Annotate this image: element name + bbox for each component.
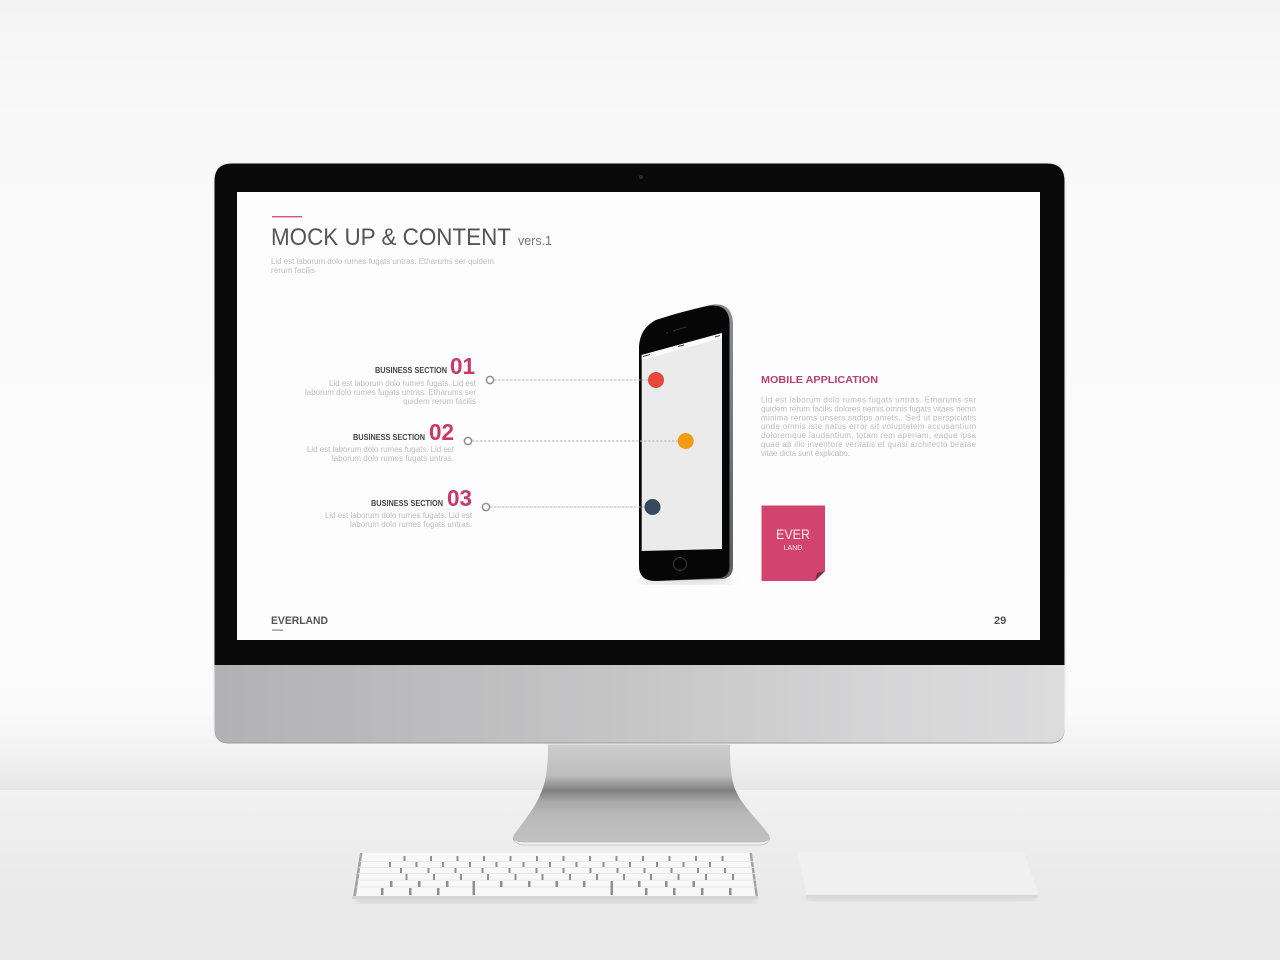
paragraph: mobile application bbox=[761, 396, 977, 458]
section 01: laborum dolo rumes fugats untras. Etharums ser bbox=[305, 388, 476, 397]
section 03: laborum dolo rumes fugats untras. bbox=[350, 520, 472, 529]
key row lines bbox=[356, 862, 757, 887]
subtitle text bbox=[271, 257, 494, 275]
key gaps bbox=[381, 856, 734, 895]
card: everland bbox=[762, 506, 825, 581]
monitor stand bbox=[513, 744, 770, 845]
section 03: Lid est laborum dolo rumes fugats. Lid est bbox=[325, 511, 473, 520]
slide screen bbox=[237, 192, 1040, 640]
section 02: 02 bbox=[429, 419, 454, 445]
section 01 bbox=[305, 353, 477, 406]
paragraph: mobile application: doloremque laudantium, totam rem aperiam, eaque ipsa bbox=[761, 431, 977, 440]
connector 03 bbox=[482, 503, 647, 511]
phone status bar bbox=[642, 333, 722, 360]
section 03: BUSINESS SECTION bbox=[371, 499, 443, 508]
section 02: BUSINESS SECTION bbox=[353, 433, 425, 442]
connector 01 bbox=[486, 376, 650, 384]
phone mockup bbox=[638, 304, 734, 584]
section 01: quidem rerum facilis bbox=[403, 397, 476, 406]
paragraph: mobile application: quae ab illo inventore veritatis et quasi architecto beatae bbox=[761, 440, 977, 449]
section 02 bbox=[307, 419, 455, 463]
marker: orange dot bbox=[678, 433, 694, 449]
trackpad surface bbox=[798, 852, 1038, 898]
trackpad bbox=[798, 852, 1038, 901]
keyboard body bbox=[352, 853, 758, 899]
card corner fold bbox=[815, 571, 825, 581]
heading: mobile application: MOBILE APPLICATION bbox=[761, 374, 878, 386]
card: everland: EVER bbox=[776, 526, 810, 542]
monitor bbox=[212, 162, 1066, 744]
paragraph: mobile application: minima rerums unsers sadips amets.. Sed ut perspiciatis bbox=[761, 413, 976, 422]
trackpad shadow bbox=[806, 896, 1036, 901]
monitor silver rim bbox=[212, 162, 1066, 744]
footer brand: EVERLAND bbox=[271, 615, 328, 627]
keyboard shadow bbox=[356, 897, 756, 903]
phone body bbox=[639, 304, 733, 581]
section 03 bbox=[325, 485, 473, 529]
title: MOCK UP & CONTENT bbox=[271, 224, 511, 251]
section 03: 03 bbox=[447, 485, 472, 511]
keyboard bbox=[352, 853, 758, 903]
page number: 29 bbox=[994, 615, 1006, 627]
connector 02 bbox=[464, 437, 680, 445]
section 01: Lid est laborum dolo rumes fugats. Lid est bbox=[329, 379, 477, 388]
title: vers.1 bbox=[518, 233, 552, 248]
subtitle text: rerum facilis bbox=[271, 266, 315, 275]
phone screen bbox=[642, 333, 722, 551]
section 01: 01 bbox=[450, 353, 475, 379]
section 02: Lid est laborum dolo rumes fugats. Lid est bbox=[307, 445, 455, 454]
marker: red dot bbox=[648, 372, 664, 388]
phone home button bbox=[674, 558, 686, 570]
card: everland: LAND bbox=[784, 545, 802, 552]
webcam bbox=[639, 175, 643, 179]
phone shadow bbox=[638, 578, 734, 584]
monitor chin bbox=[214, 664, 1064, 744]
marker: navy dot bbox=[644, 499, 660, 515]
section 02: laborum dolo rumes fugats untras. bbox=[332, 454, 454, 463]
section 01: BUSINESS SECTION bbox=[375, 366, 447, 375]
slide accent line bbox=[272, 216, 302, 217]
paragraph: mobile application: quidem rerum facilis dolores nemis omnis fugats vitaes nemo bbox=[761, 404, 977, 413]
monitor bezel bbox=[214, 164, 1064, 665]
subtitle text: Lid est laborum dolo rumes fugats untras. Etharums ser quidem bbox=[271, 257, 494, 266]
paragraph: mobile application: Lid est laborum dolo rumes fugats untras. Etharums ser bbox=[761, 396, 976, 404]
paragraph: mobile application: vitae dicta sunt explicabo. bbox=[761, 449, 850, 458]
background: desk bbox=[0, 790, 1280, 960]
paragraph: mobile application: unde omnis iste natus error sit voluptatem accusantium bbox=[761, 422, 976, 431]
phone earpiece bbox=[673, 327, 686, 331]
